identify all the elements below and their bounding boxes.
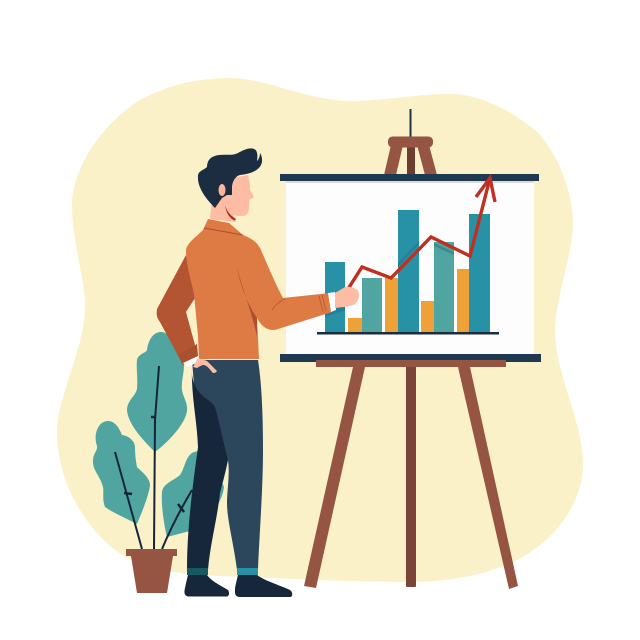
easel [304,109,518,589]
teal bars [325,210,490,333]
ear [218,184,226,196]
board top bar [280,174,539,181]
neck and face [210,175,254,222]
chart board [280,174,541,367]
bar chart [317,210,499,334]
background blob [57,78,583,582]
top leaf [127,332,187,452]
shoes [184,575,229,596]
board bottom bar [280,354,541,362]
easel top bracket [384,109,437,175]
right leaf [162,451,224,537]
trousers [187,360,263,570]
rising trend arrow [348,178,495,289]
pot [126,549,177,593]
easel ledge [316,360,506,367]
green bars [362,242,454,333]
bar shadows [325,241,454,317]
sleeve folds [272,295,326,312]
orange bars [348,269,469,333]
baseline [317,332,499,334]
easel legs [304,365,518,589]
neck shadow [225,205,236,220]
person [157,148,359,597]
white panel [286,180,534,356]
sweater fold [237,267,257,337]
left leaf [93,421,150,524]
plant [93,332,224,593]
collar line [204,228,243,235]
sweater torso [186,219,332,359]
stems [115,366,192,549]
back cuff and hand on hip [178,344,217,373]
back arm [157,255,198,365]
pointing cuff and hand [328,287,359,312]
trouser cuffs [187,568,208,575]
hair [198,148,262,208]
